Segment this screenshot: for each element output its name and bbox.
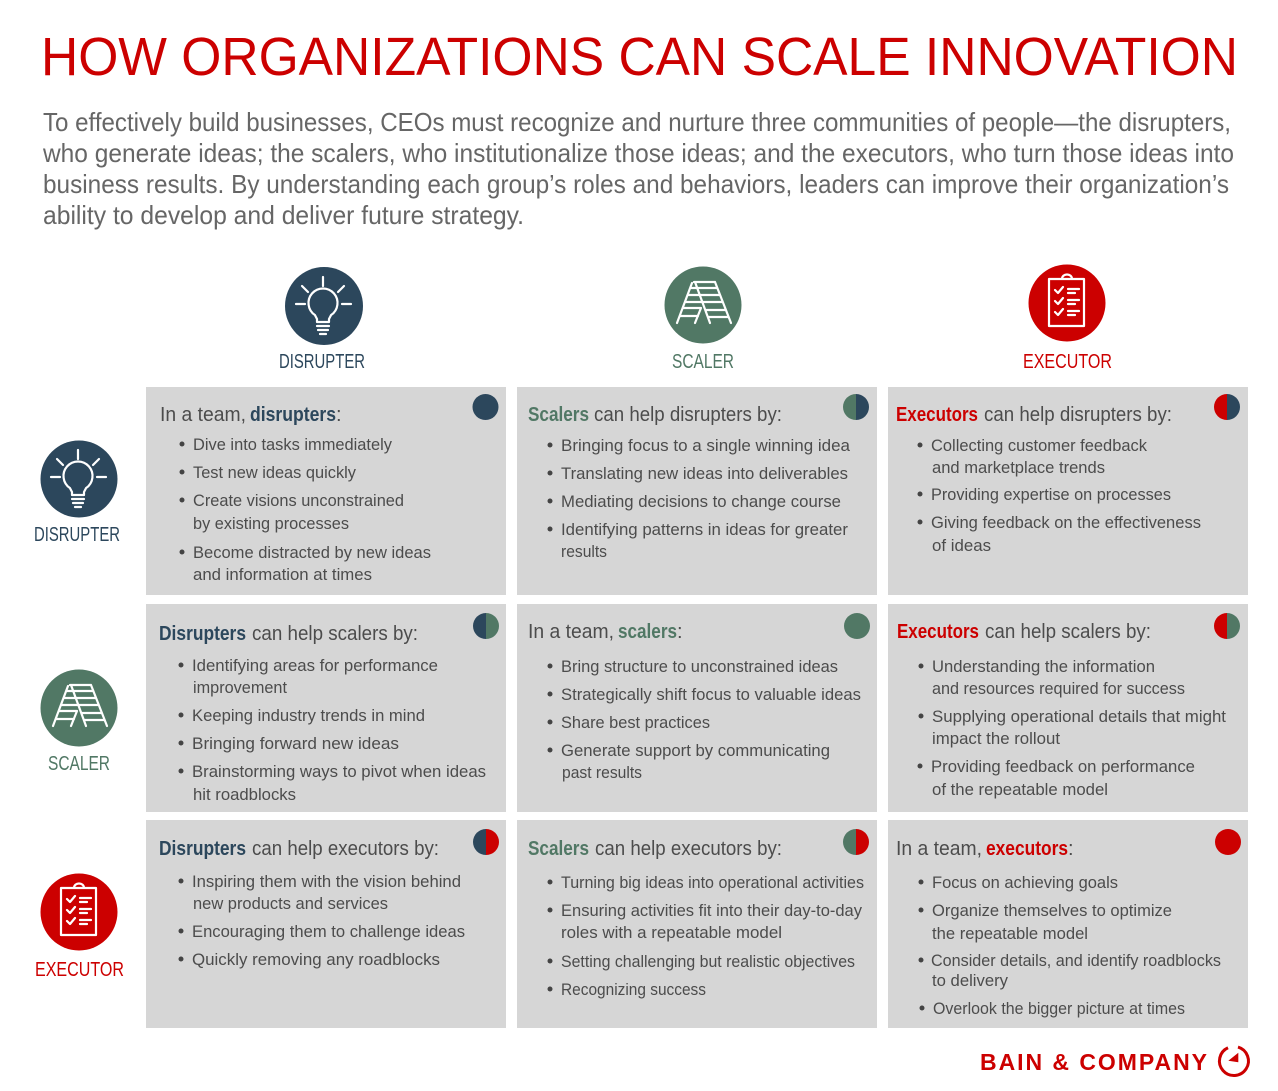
icon: clipboard xyxy=(40,874,118,950)
panel: disrupters help scalers: can help scalers by: xyxy=(252,623,418,645)
panel: scaler in a team: Strategically shift focus to valuable ideas xyxy=(561,686,861,704)
panel: executors help scalers: Supplying operational details that might xyxy=(932,708,1226,726)
panel: executors help scalers: Providing feedback on performance xyxy=(931,758,1195,776)
panel: executors help disrupters: can help disrupters by: xyxy=(984,404,1172,426)
panel: executors help disrupters: Providing expertise on processes xyxy=(931,486,1171,504)
panel: disrupter in a team: Dive into tasks immediately xyxy=(193,436,393,454)
panel: disrupter in a team: Become distracted by new ideas xyxy=(193,544,431,562)
panel: executor in a team: executors xyxy=(986,838,1068,860)
panel: disrupters help scalers xyxy=(146,604,506,812)
panel: scaler in a team: Bring structure to unconstrained ideas xyxy=(561,658,838,676)
panel: scalers help executors: Recognizing success xyxy=(561,981,706,999)
panel: executor in a team: Overlook the bigger picture at times xyxy=(933,1000,1185,1018)
panel: disrupter in a team: Create visions unconstrained xyxy=(193,492,404,510)
icon: clipboard xyxy=(1028,264,1106,342)
title: HOW ORGANIZATIONS CAN SCALE INNOVATION xyxy=(41,27,1238,87)
panel: executor in a team xyxy=(888,820,1248,1028)
intro paragraph: who generate ideas; the scalers, who institutionalize those ideas; and the executors, who turn those ideas into xyxy=(42,138,1234,168)
panel: disrupter in a team: and information at times xyxy=(193,566,372,584)
row header: executor xyxy=(35,874,124,981)
panel: scalers help executors: roles with a repeatable model xyxy=(561,924,782,942)
panel: scaler in a team: scalers xyxy=(618,621,677,643)
panel: disrupter in a team: Test new ideas quickly xyxy=(193,464,357,482)
panel: scalers help executors: can help executors by: xyxy=(595,838,782,860)
panel: executors help scalers: impact the rollout xyxy=(932,730,1060,748)
panel: scalers help disrupters: Translating new ideas into deliverables xyxy=(561,465,848,483)
panel: executor in a team: to delivery xyxy=(932,972,1009,990)
panel: scaler in a team: Generate support by communicating xyxy=(561,742,830,760)
panel: scalers help disrupters: can help disrupters by: xyxy=(594,404,782,426)
panel: executors help disrupters: and marketplace trends xyxy=(932,459,1105,477)
panel: scalers help executors: Scalers xyxy=(528,838,589,860)
column header: executor xyxy=(1023,264,1112,373)
panel: disrupter in a team: by existing processes xyxy=(193,515,349,533)
panel: disrupter in a team xyxy=(146,387,506,595)
panel: executors help disrupters: Giving feedback on the effectiveness xyxy=(931,514,1201,532)
panel: disrupters help executors: new products and services xyxy=(193,895,388,913)
panel: executors help scalers: of the repeatable model xyxy=(932,781,1108,799)
column header: executor: EXECUTOR xyxy=(1023,351,1112,373)
panel: scalers help disrupters: Bringing focus to a single winning idea xyxy=(561,437,851,455)
panel: scaler in a team: Share best practices xyxy=(561,714,710,732)
panel: executor in a team: Organize themselves to optimize xyxy=(932,902,1172,920)
panel: scalers help executors xyxy=(517,820,877,1028)
panel: executors help disrupters: Collecting customer feedback xyxy=(931,437,1148,455)
panel: disrupter in a team: In a team, xyxy=(160,404,246,426)
panel: scalers help executors: Setting challenging but realistic objectives xyxy=(561,953,855,971)
panel: disrupters help executors: Quickly removing any roadblocks xyxy=(192,951,440,969)
panel: executors help disrupters xyxy=(888,387,1248,595)
row header: executor: EXECUTOR xyxy=(35,959,124,981)
panel: executors help scalers xyxy=(888,604,1248,812)
panel: scalers help disrupters: Scalers xyxy=(528,404,589,426)
panel: disrupters help scalers: Identifying areas for performance xyxy=(192,657,438,675)
panel: disrupters help executors: Inspiring them with the vision behind xyxy=(192,873,461,891)
icon: light bulb xyxy=(285,267,363,345)
panel: executors help scalers: and resources required for success xyxy=(932,680,1185,698)
panel: executor in a team: Consider details, and identify roadblocks xyxy=(931,952,1221,970)
panel: scalers help disrupters: Mediating decisions to change course xyxy=(561,493,841,511)
panel: disrupters help executors: Encouraging them to challenge ideas xyxy=(192,923,465,941)
panel: disrupters help scalers: Keeping industry trends in mind xyxy=(192,707,425,725)
intro paragraph xyxy=(42,107,1234,230)
panel: scalers help executors: Ensuring activities fit into their day-to-day xyxy=(561,902,863,920)
panel: executors help scalers: can help scalers by: xyxy=(985,621,1151,643)
panel: disrupters help executors: can help executors by: xyxy=(252,838,439,860)
panel: scaler in a team xyxy=(517,604,877,812)
panel: executor in a team: Focus on achieving goals xyxy=(932,874,1118,892)
column header: scaler xyxy=(664,266,742,373)
column header: disrupter xyxy=(279,267,365,373)
icon: ladder xyxy=(664,266,742,344)
row header: scaler: SCALER xyxy=(48,753,110,775)
row header: disrupter: DISRUPTER xyxy=(34,524,120,546)
panel: disrupters help scalers: Brainstorming ways to pivot when ideas xyxy=(192,763,486,781)
panel: disrupters help scalers: hit roadblocks xyxy=(193,786,296,804)
panel: disrupters help scalers: improvement xyxy=(193,679,287,697)
panel: disrupter in a team: : xyxy=(336,404,342,426)
panel: executor in a team: In a team, xyxy=(896,838,982,860)
panel: scalers help disrupters xyxy=(517,387,877,595)
icon: ladder xyxy=(40,670,118,746)
logo: Bain & Company: BAIN & COMPANY xyxy=(980,1049,1207,1075)
panel: scalers help disrupters: Identifying patterns in ideas for greater xyxy=(561,521,849,539)
panel: disrupter in a team: disrupters xyxy=(250,404,336,426)
panel: scalers help disrupters: results xyxy=(561,543,607,561)
panel: executors help disrupters: Executors xyxy=(896,404,978,426)
panel: executor in a team: : xyxy=(1068,838,1074,860)
icon: light bulb xyxy=(40,440,118,518)
panel: scaler in a team: In a team, xyxy=(528,621,614,643)
panel: scaler in a team: : xyxy=(677,621,683,643)
panel: disrupters help scalers: Bringing forward new ideas xyxy=(192,735,399,753)
panel: scalers help executors: Turning big ideas into operational activities xyxy=(561,874,864,892)
panel: disrupters help scalers: Disrupters xyxy=(159,623,246,645)
row header: scaler xyxy=(40,670,118,775)
panel: executors help scalers: Executors xyxy=(897,621,979,643)
column header: disrupter: DISRUPTER xyxy=(279,351,365,373)
panel: disrupters help executors: Disrupters xyxy=(159,838,246,860)
panel: disrupters help executors xyxy=(146,820,506,1028)
intro paragraph: ability to develop and deliver future strategy. xyxy=(43,200,524,230)
panel: executors help scalers: Understanding the information xyxy=(932,658,1155,676)
row header: disrupter xyxy=(34,440,120,546)
icon: logo ring xyxy=(1219,1047,1248,1076)
column header: scaler: SCALER xyxy=(672,351,734,373)
panel: scaler in a team: past results xyxy=(562,764,642,782)
panel: executor in a team: the repeatable model xyxy=(932,925,1088,943)
intro paragraph: business results. By understanding each group’s roles and behaviors, leaders can improve their organization’s xyxy=(43,169,1229,199)
panel: executors help disrupters: of ideas xyxy=(932,537,991,555)
